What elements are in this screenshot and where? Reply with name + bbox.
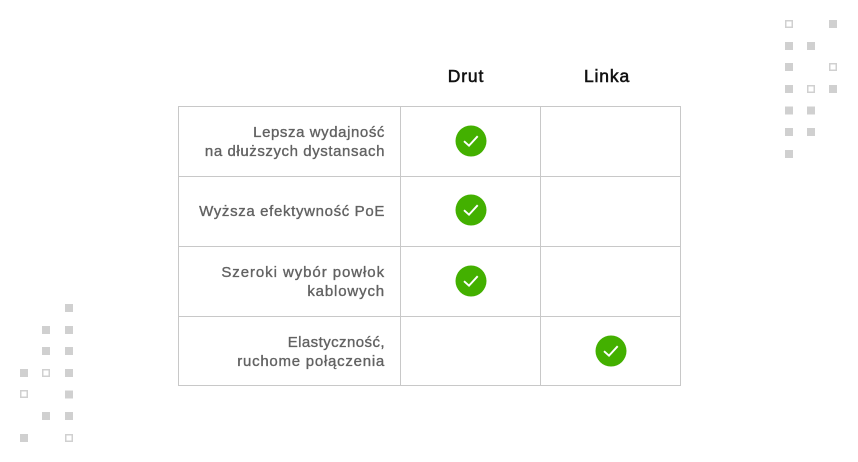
row label: Lepsza wydajność <box>205 124 385 160</box>
row label: Elastyczność <box>237 334 385 370</box>
row label: Elastyczność: ruchome połączenia <box>237 353 385 370</box>
column heading: Drut: Drut <box>448 66 484 86</box>
check icon: row 1 Drut <box>456 126 486 156</box>
row label: Elastyczność: Elastyczność, <box>288 334 385 351</box>
row label: Wyższa efektywność PoE: Wyższa efektywność PoE <box>199 203 385 220</box>
row label: Szeroki wybór powłok <box>221 264 385 300</box>
column heading: Linka: Linka <box>584 66 630 86</box>
row label: Lepsza wydajność: Lepsza wydajność <box>253 124 385 141</box>
row label: Lepsza wydajność: na dłuższych dystansach <box>205 143 385 160</box>
row label: Szeroki wybór powłok: Szeroki wybór powłok <box>221 264 385 281</box>
check icon: row 4 Linka <box>596 336 626 366</box>
row label: Szeroki wybór powłok: kablowych <box>307 283 385 300</box>
check icon: row 2 Drut <box>456 194 486 226</box>
check icon: row 3 Drut <box>456 266 486 296</box>
